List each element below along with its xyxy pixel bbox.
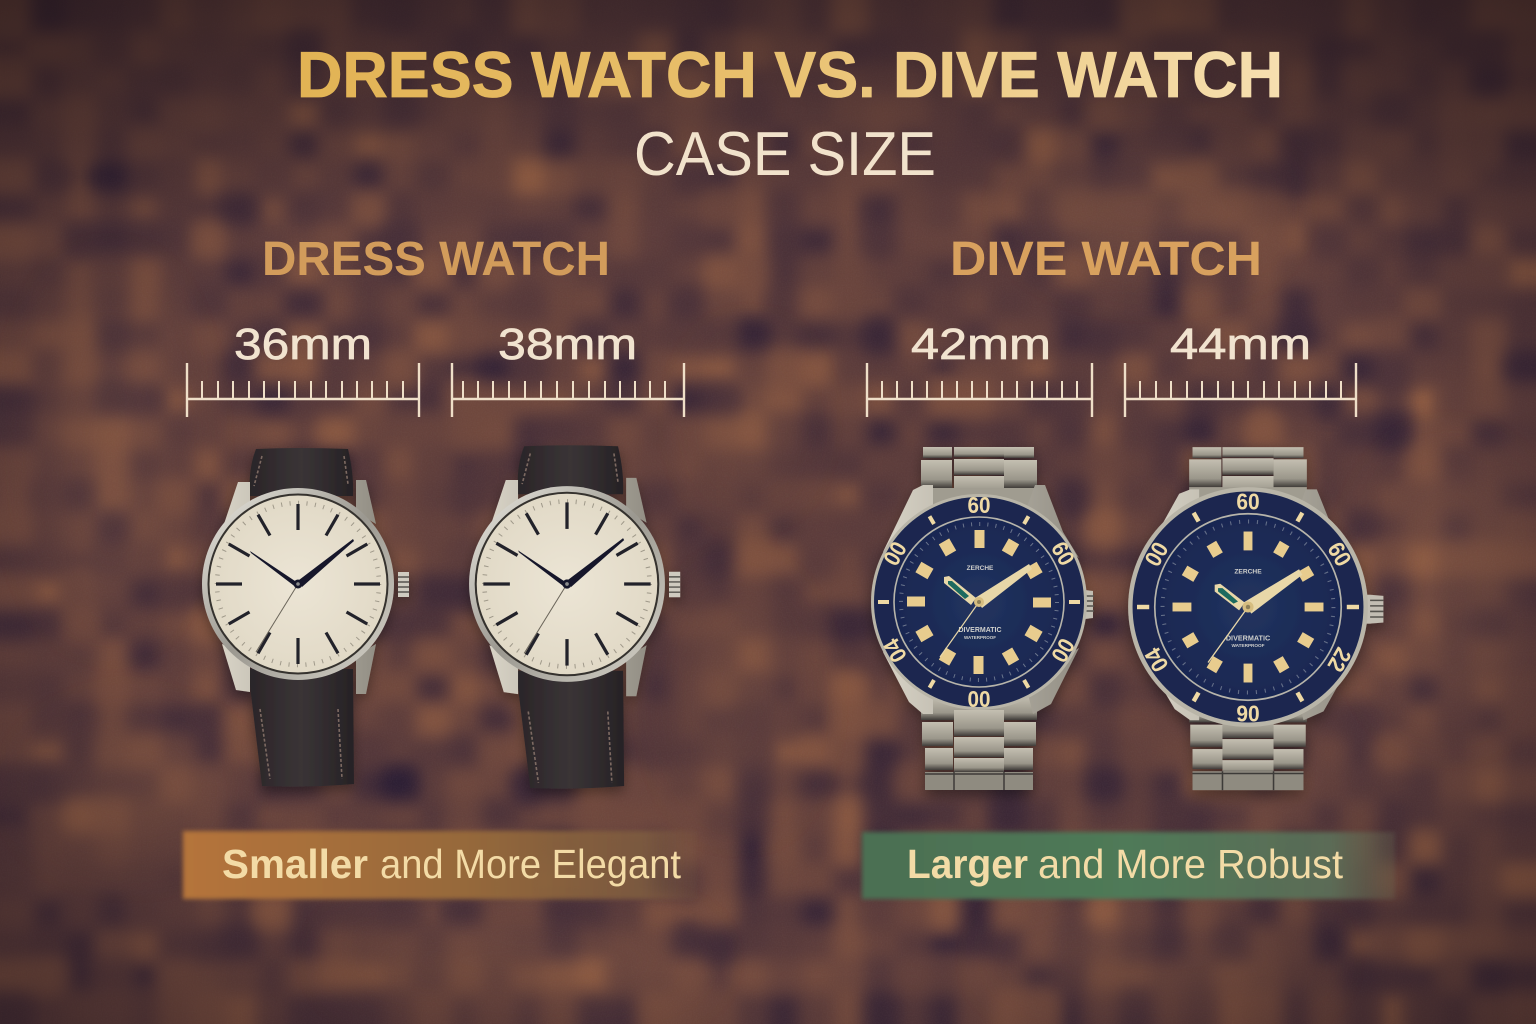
dial: [477, 494, 657, 674]
bezel markings: 00: [878, 537, 912, 570]
bezel markings: 00: [1139, 538, 1174, 571]
bezel: [1133, 492, 1363, 722]
banner text: [907, 841, 1344, 887]
bezel markings: 90: [1236, 700, 1260, 726]
bezel: [874, 497, 1084, 707]
bezel markings: 00: [1046, 634, 1080, 667]
heading: dive watch: DIVE WATCH: [950, 233, 1262, 286]
hour markers: [483, 502, 651, 666]
bezel markings: 60: [1046, 537, 1080, 570]
bezel markings: 60: [1236, 488, 1260, 514]
crown: [398, 572, 409, 597]
crown: [669, 572, 680, 597]
leather strap: [516, 445, 624, 789]
case: [1128, 487, 1368, 727]
banner: smaller and more elegant: [183, 831, 696, 899]
bezel markings: 04: [878, 634, 912, 667]
crown: [1080, 590, 1093, 619]
watch: dress 36mm: [202, 448, 409, 787]
banner text: Larger: [907, 841, 1028, 887]
heading: dress watch: DRESS WATCH: [262, 233, 610, 286]
dial text: WATERPROOF: [1231, 643, 1265, 648]
banner text: and More Robust: [1038, 841, 1344, 887]
leather strap: [248, 448, 354, 787]
hands: [250, 539, 354, 652]
dial text: DIVERMATIC: [958, 627, 1002, 634]
dial: [894, 517, 1064, 687]
watch: dive 42mm: [871, 447, 1094, 790]
ruler: 38mm: [452, 363, 684, 417]
dial text: WATERPROOF: [964, 635, 996, 640]
hands: [1208, 569, 1302, 662]
size label: 36mm: 36mm: [234, 320, 372, 369]
dial text: ZERCHE: [1234, 569, 1262, 576]
hour markers: [907, 530, 1051, 674]
banner text: [222, 841, 682, 887]
ruler: 36mm: [187, 363, 419, 417]
crown: [1366, 595, 1383, 624]
banner text: Smaller: [222, 841, 368, 887]
bezel markings: 04: [1139, 643, 1174, 676]
case: [202, 488, 394, 680]
size label: 42mm: 42mm: [911, 320, 1051, 369]
banner: larger and more robust: [862, 832, 1395, 899]
size label: 44mm: 44mm: [1170, 320, 1311, 369]
dial text: ZERCHE: [967, 565, 994, 572]
lugs: [883, 485, 1079, 714]
dial: [210, 496, 386, 672]
banner text: and More Elegant: [380, 841, 682, 887]
subtitle: CASE SIZE: [634, 120, 936, 189]
bezel markings: [1137, 488, 1359, 726]
size label: 38mm: 38mm: [498, 320, 637, 369]
hands: [940, 564, 1032, 657]
dial text: DIVERMATIC: [1226, 633, 1270, 642]
bezel markings: 00: [968, 686, 990, 712]
dial text: [1226, 569, 1270, 648]
title: DRESS WATCH VS. DIVE WATCH: [297, 38, 1283, 111]
case: [469, 486, 665, 682]
bezel markings: [878, 492, 1080, 712]
dial text: [958, 565, 1002, 640]
bezel markings: 60: [968, 492, 990, 518]
lugs: [222, 480, 376, 694]
hands: [518, 538, 624, 653]
case: [871, 494, 1087, 710]
hour markers: [216, 504, 380, 664]
steel bracelet: [921, 447, 1037, 790]
dial: [1155, 514, 1341, 700]
ruler: 42mm: [867, 363, 1092, 417]
lugs: [1146, 489, 1355, 720]
watch: dress 38mm: [469, 445, 680, 789]
lugs: [489, 478, 647, 696]
hour markers: [1173, 532, 1323, 682]
steel bracelet: [1189, 447, 1307, 790]
bezel markings: 60: [1322, 538, 1357, 571]
ruler: 44mm: [1125, 363, 1356, 417]
watch: dive 44mm: [1128, 447, 1383, 790]
bezel markings: 22: [1322, 643, 1357, 676]
